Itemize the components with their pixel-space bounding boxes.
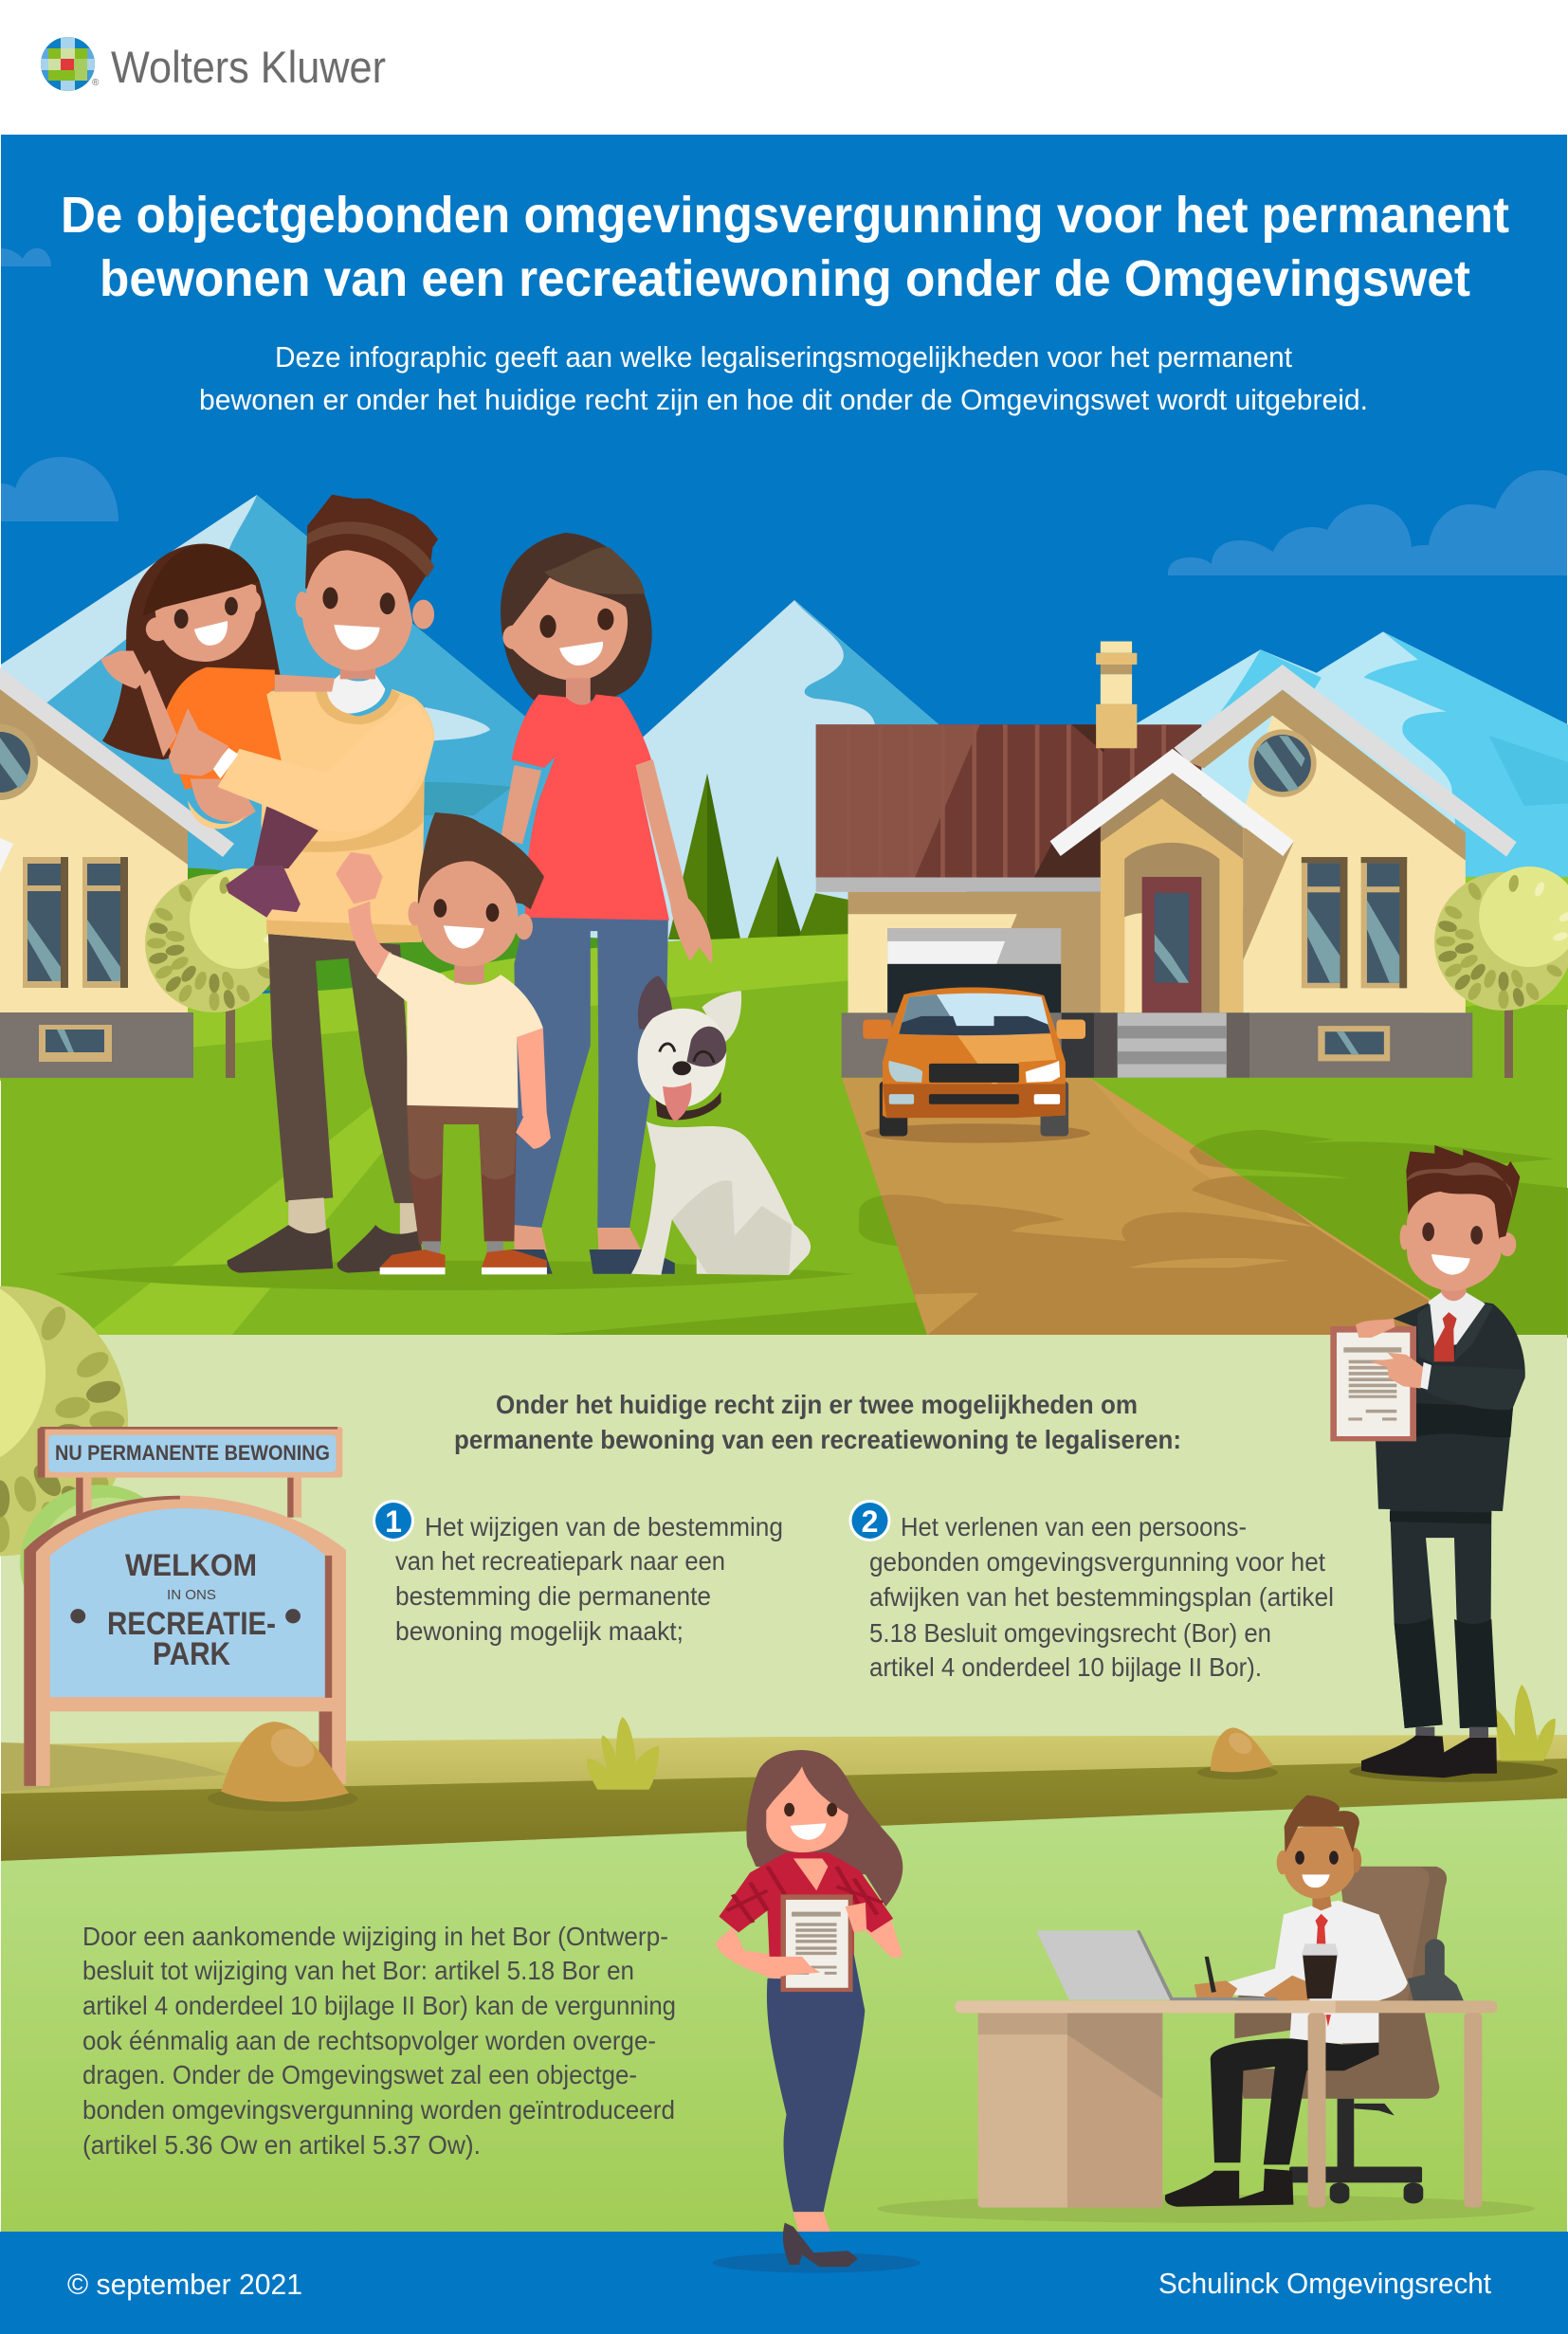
face — [766, 1766, 848, 1852]
arms — [716, 1921, 903, 1978]
lawn: tree shadows — [859, 1130, 1568, 1338]
subtitle — [199, 340, 1368, 416]
cloud: right — [1168, 470, 1567, 575]
option 1 — [373, 1500, 783, 1646]
lower field — [1, 1798, 1567, 2232]
person: woman with clipboard — [716, 1750, 903, 2252]
round window — [0, 724, 38, 800]
lower paragraph: ook éénmalig aan de rechtsopvolger worden overge- — [82, 2026, 656, 2055]
stone base — [842, 1012, 1472, 1078]
icon: checkered globe — [41, 37, 96, 92]
clipboard — [1330, 1326, 1416, 1441]
mountain: left — [1, 495, 588, 948]
garage wall — [848, 892, 1101, 1012]
shirt — [1226, 1901, 1408, 2045]
footer date: © september 2021 — [67, 2268, 302, 2301]
trousers — [1211, 2038, 1378, 2164]
pine trees — [668, 774, 853, 945]
lower paragraph: besluit tot wijziging van het Bor: artikel 5.18 Bor en — [82, 1956, 634, 1985]
rock and bush on verge — [208, 1717, 659, 1812]
registered mark: ® — [92, 78, 100, 88]
heading: panel intro: Onder het huidige recht zijn er twee mogelijkheden om — [496, 1390, 1138, 1419]
option 2 text: afwijken van het bestemmingsplan (artikel — [869, 1582, 1334, 1612]
tree: bottom left — [0, 1275, 128, 1556]
base — [0, 1012, 193, 1078]
option 2 text: 5.18 Besluit omgevingsrecht (Bor) en — [869, 1618, 1271, 1648]
house: left — [0, 667, 234, 1078]
windows — [23, 857, 128, 988]
round window — [1249, 729, 1317, 797]
heading: panel intro — [454, 1390, 1181, 1454]
option 2 — [849, 1500, 1334, 1682]
wordmark: Wolters Kluwer — [111, 42, 386, 92]
option 1 text: van het recreatiepark naar een — [395, 1546, 725, 1576]
porch — [1101, 798, 1243, 1012]
woman's shoes and shadow over footer — [713, 2223, 921, 2272]
car — [863, 987, 1090, 1143]
footer bar — [0, 2223, 1568, 2334]
garage roof — [816, 724, 1201, 878]
coffee cup — [1302, 1943, 1339, 1998]
person: man at desk — [877, 1796, 1535, 2223]
ground shadow — [54, 1261, 853, 1290]
rock — [208, 1722, 357, 1812]
badge 1 — [373, 1500, 414, 1541]
lower paragraph: artikel 4 onderdeel 10 bijlage II Bor) kan de vergunning — [82, 1991, 676, 2020]
boy — [336, 812, 551, 1274]
tie — [1315, 1914, 1331, 2027]
main face — [50, 1508, 325, 1697]
dog — [631, 976, 811, 1275]
house: right with garage — [816, 642, 1517, 1078]
mother — [501, 533, 712, 1274]
gable band — [0, 689, 188, 865]
sign dots — [70, 1609, 301, 1623]
jeans — [767, 1955, 865, 2212]
suit jacket — [1376, 1303, 1525, 1523]
chimney — [1096, 642, 1137, 748]
tie — [1434, 1312, 1457, 1361]
subtitle: bewonen er onder het huidige recht zijn en hoe dit onder de Omgevingswet wordt uitgebreid. — [199, 383, 1368, 416]
light green hill — [0, 934, 853, 1081]
dark green hill — [180, 868, 607, 991]
wall — [0, 689, 188, 1012]
option 1 text: Het wijzigen van de bestemming — [425, 1512, 783, 1541]
hero scene background — [0, 135, 1568, 1338]
title: De objectgebonden omgevingsvergunning voor het permanent — [61, 187, 1509, 244]
sign text: park: PARK — [153, 1636, 230, 1672]
shoes — [1361, 1736, 1497, 1778]
laptop — [1036, 1930, 1277, 2000]
khaki verge — [1, 1735, 1567, 1820]
subtitle: Deze infographic geeft aan welke legaliseringsmogelijkheden voor het permanent — [275, 340, 1292, 374]
title — [61, 187, 1509, 307]
head — [1277, 1796, 1361, 1910]
top board — [38, 1427, 342, 1518]
head — [1400, 1145, 1520, 1291]
lower paragraph: dragen. Onder de Omgevingswet zal een objectge- — [82, 2060, 637, 2089]
father's arm around girl — [218, 702, 433, 831]
hands and pen — [1194, 1957, 1309, 2000]
lawn: shadow wedge — [545, 1301, 943, 1335]
driveway shadows — [882, 1146, 1430, 1335]
rock: right — [1197, 1727, 1278, 1779]
title: bewonen van een recreatiewoning onder de Omgevingswet — [100, 250, 1470, 307]
father — [228, 495, 438, 1273]
cloud: large left — [1, 457, 119, 521]
lower paragraph: (artikel 5.36 Ow en artikel 5.37 Ow). — [82, 2130, 481, 2160]
mountain: middle — [588, 600, 967, 948]
ground shadow — [1349, 1760, 1558, 1782]
option 2 text — [869, 1512, 1334, 1682]
lower paragraph: Door een aankomende wijziging in het Bor (Ontwerp- — [82, 1922, 668, 1951]
sign heading: NU PERMANENTE BEWONING — [55, 1441, 330, 1465]
badge 2: 2 — [862, 1504, 878, 1539]
grey roof strip — [1174, 665, 1517, 857]
bush behind lawyer — [1495, 1685, 1556, 1760]
shoes — [1165, 2169, 1293, 2207]
clipboard — [761, 1894, 866, 1992]
logo: Wolters Kluwer — [41, 37, 386, 92]
shirt — [719, 1852, 893, 1978]
bush — [587, 1717, 659, 1790]
sky — [1, 135, 1567, 1335]
family illustration — [54, 495, 853, 1290]
option 2 text: artikel 4 onderdeel 10 bijlage II Bor). — [869, 1652, 1262, 1682]
girl — [100, 543, 433, 918]
left verge hill — [1, 1742, 228, 1792]
chair — [1234, 1867, 1447, 2203]
cloud: small left — [1, 248, 51, 266]
desk — [955, 2000, 1497, 2208]
dark path — [1, 1759, 1567, 1861]
hair — [746, 1750, 903, 1906]
white gable fragment — [0, 838, 13, 872]
back bush — [20, 1485, 180, 1641]
sign text: in ons: IN ONS — [167, 1587, 216, 1603]
main gable wall — [1243, 716, 1466, 1012]
tree: left — [145, 868, 290, 1078]
garage door — [887, 928, 1061, 1012]
badge 2 — [849, 1500, 891, 1541]
mountain: right — [1137, 631, 1568, 907]
ground shadow — [877, 2195, 1535, 2223]
neck and shirt — [1417, 1285, 1493, 1363]
trousers — [1390, 1503, 1497, 1738]
jacket sleeve — [1424, 1365, 1523, 1410]
option 2 text: gebonden omgevingsvergunning voor het — [869, 1547, 1325, 1577]
info panel background — [1, 1335, 1567, 1809]
phone — [1408, 1939, 1464, 2000]
windows — [1302, 857, 1407, 988]
lawn-coloured path band and lower field — [1, 1735, 1567, 2232]
lower paragraph — [82, 1922, 676, 2160]
sign text: recreatie: RECREATIE- — [107, 1606, 276, 1642]
door — [1142, 877, 1201, 1012]
lawn: light ray — [85, 1104, 398, 1335]
legs — [793, 2212, 833, 2252]
sign text: welkom: WELKOM — [125, 1548, 257, 1582]
hands — [1356, 1319, 1431, 1390]
option 1 text: bestemming die permanente — [395, 1581, 711, 1611]
white front gable — [1050, 749, 1294, 856]
option 1 text: bewoning mogelijk maakt; — [395, 1616, 684, 1646]
option 1 text — [395, 1512, 783, 1646]
person: lawyer with clipboard — [1330, 1145, 1558, 1782]
main frame — [24, 1496, 346, 1786]
basement window — [39, 1025, 112, 1062]
sign: recreation park — [20, 1427, 346, 1786]
gutter — [816, 878, 1101, 892]
driveway — [842, 1078, 1431, 1335]
badge 1: 1 — [385, 1504, 402, 1539]
option 2 text: Het verlenen van een persoons- — [901, 1512, 1247, 1541]
lawn — [1, 976, 1567, 1335]
footer publisher: Schulinck Omgevingsrecht — [1158, 2267, 1491, 2300]
lower paragraph: bonden omgevingsvergunning worden geïntroduceerd — [82, 2095, 675, 2124]
tree: right — [1434, 866, 1568, 1078]
roof strip — [0, 667, 234, 857]
heading: panel intro: permanente bewoning van een recreatiewoning te legaliseren: — [454, 1425, 1181, 1454]
